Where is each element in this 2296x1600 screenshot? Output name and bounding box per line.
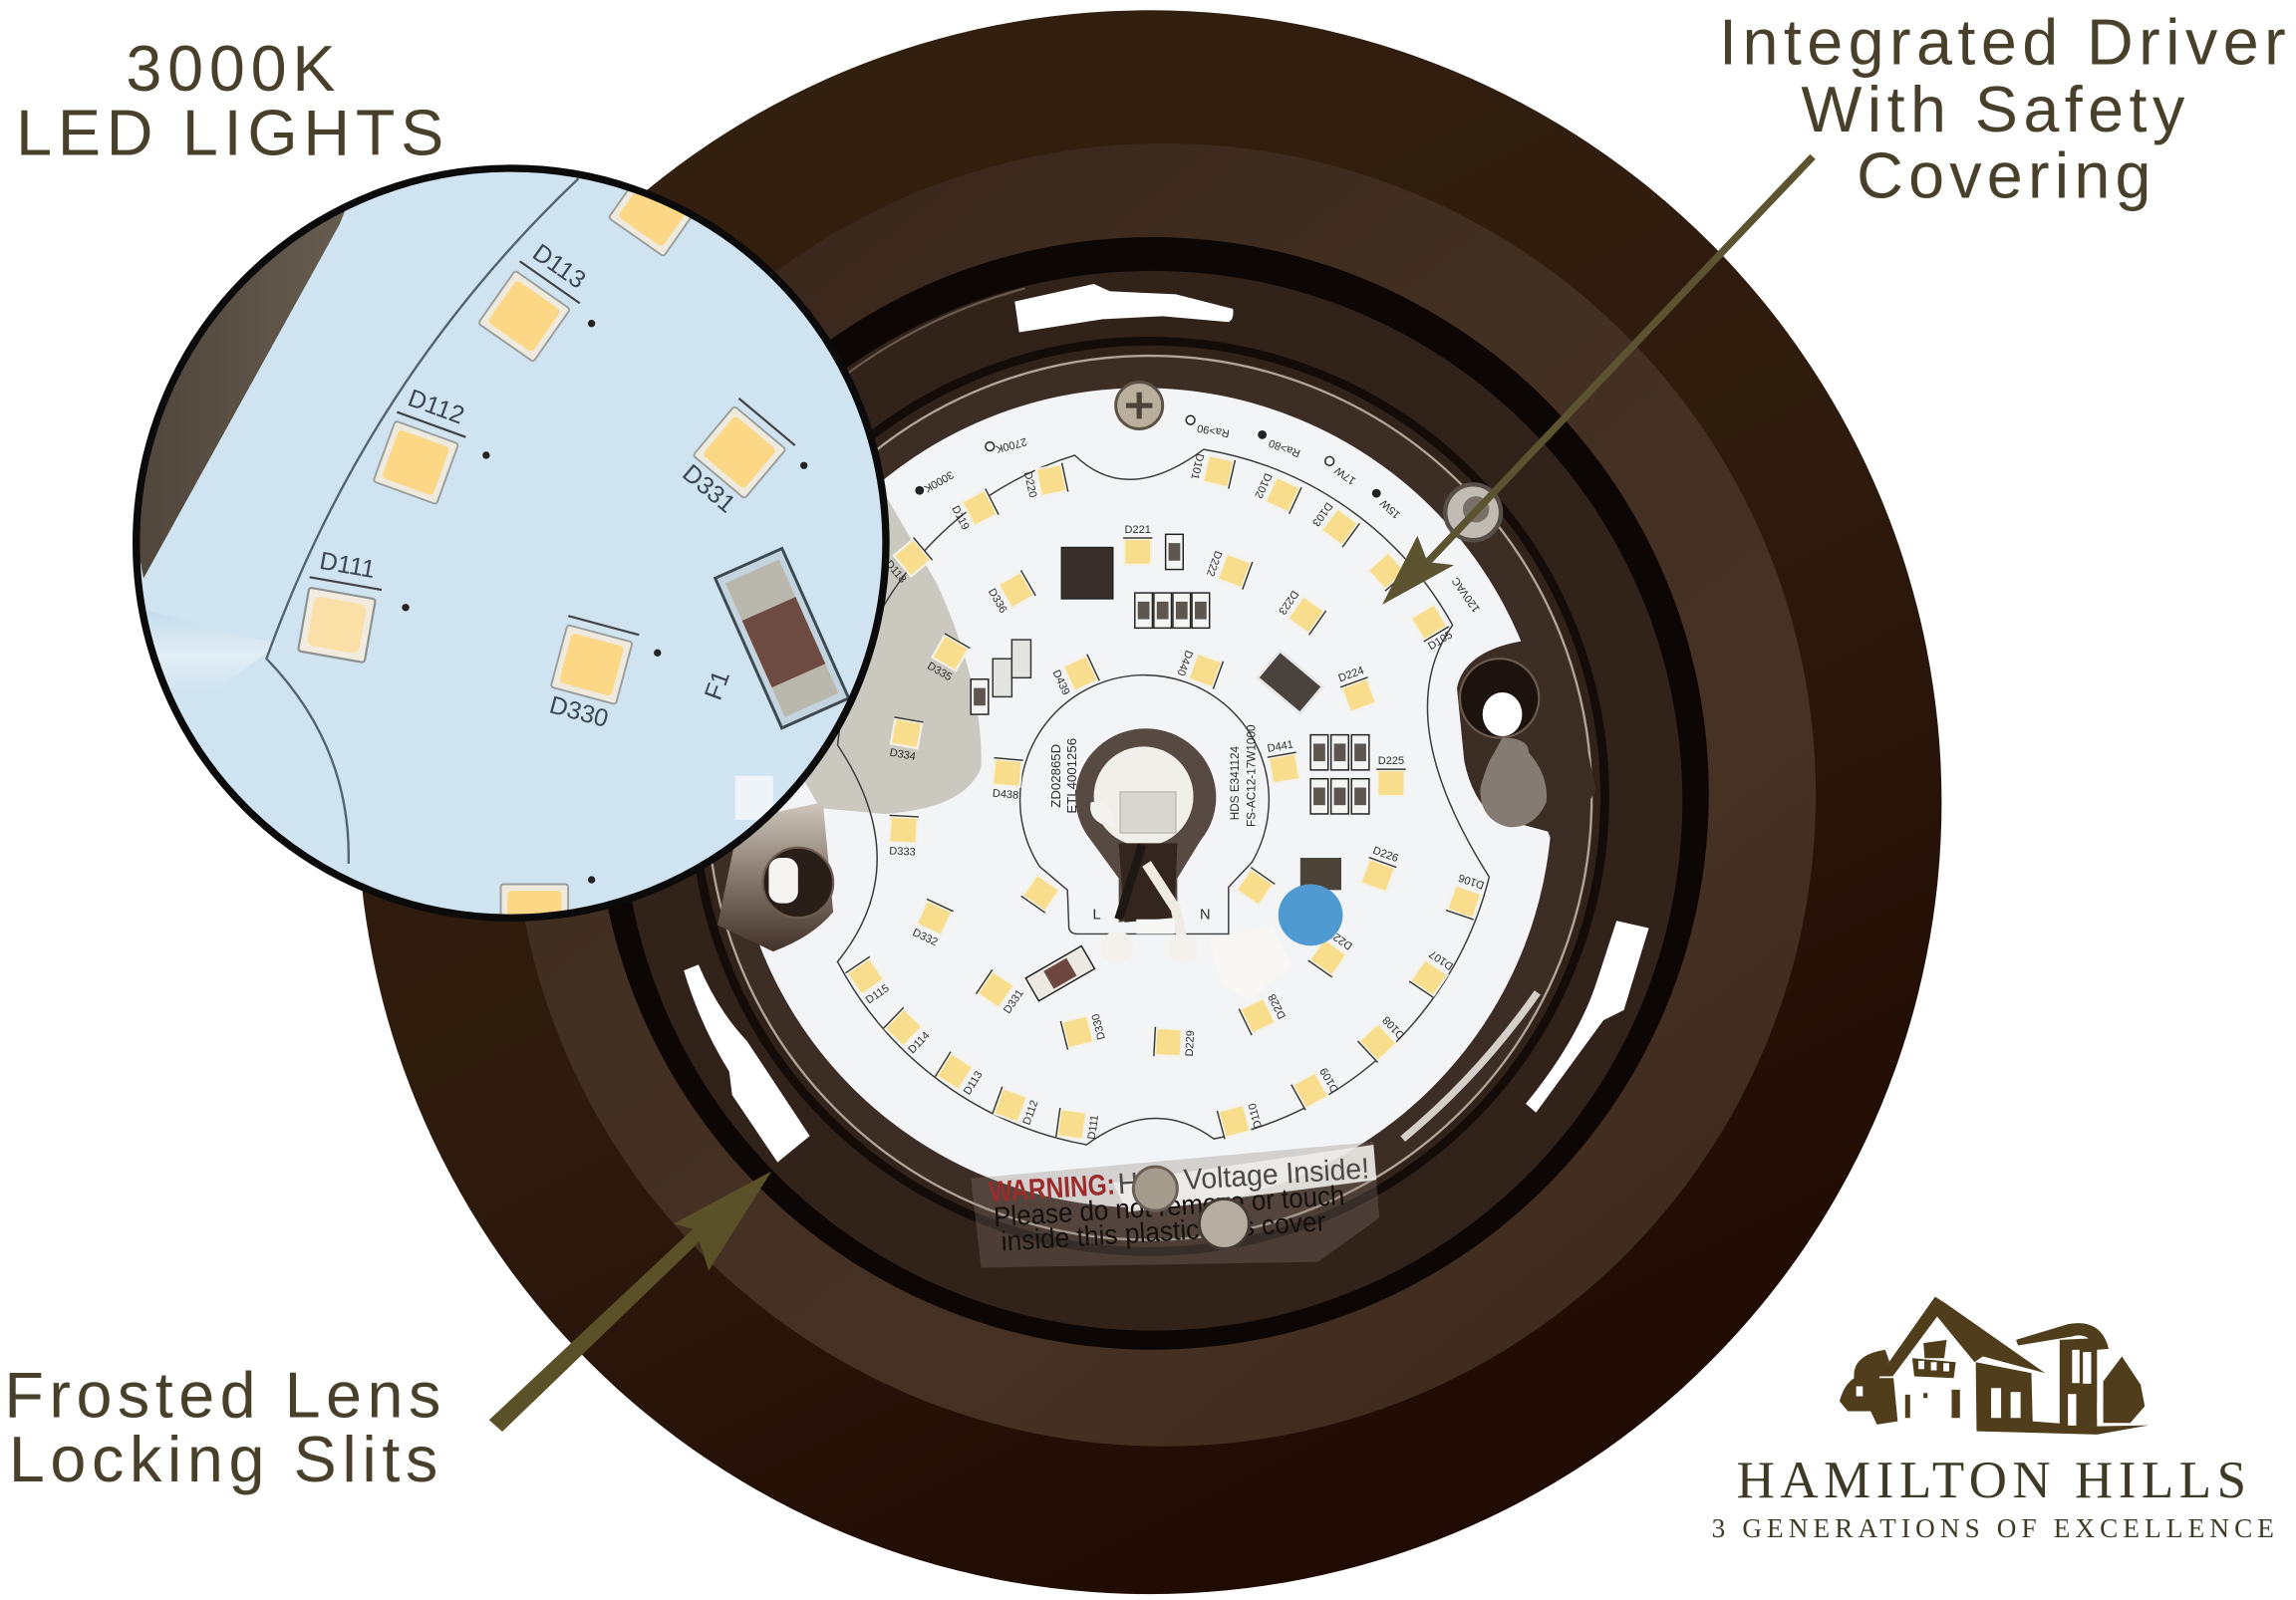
arrow: frosted lens slits	[489, 1171, 771, 1432]
LEDs on board: D115	[864, 982, 892, 1006]
LED track outline	[837, 449, 1489, 1145]
label: frosted lens locking slits: Locking Slits	[9, 1423, 437, 1495]
center wire opening	[1075, 728, 1216, 963]
warning text: Please do not remove or touch	[993, 1180, 1345, 1232]
label: frosted lens locking slits: Frosted Lens	[4, 1358, 440, 1431]
tagline: 3 GENERATIONS OF EXCELLENCE	[1712, 1513, 2274, 1543]
board silkscreen print: HDS E341124	[1229, 746, 1242, 820]
inset border	[137, 168, 886, 918]
LEDs on board: D110	[1247, 1102, 1265, 1130]
LEDs on board: D105	[1426, 629, 1455, 653]
LED D112	[373, 389, 466, 504]
circuit board	[718, 383, 1596, 1267]
keyhole opening	[1483, 692, 1522, 736]
warning sticker	[971, 1142, 1379, 1267]
LED partial bottom	[500, 883, 570, 915]
LEDs on board: D331	[1002, 987, 1026, 1016]
LEDs on board: D112	[1021, 1099, 1041, 1127]
stepped inner trim band	[512, 143, 1816, 1447]
LEDs on board: D335	[925, 661, 954, 683]
lens glare streak, lower right	[1403, 992, 1538, 1139]
outer trim ring	[358, 10, 1941, 1594]
board silkscreen print	[915, 415, 1483, 924]
logo: Hamilton Hills	[1712, 1296, 2274, 1543]
label: integrated driver: With Safety	[1801, 73, 2185, 145]
LEDs on board: D441	[1267, 738, 1294, 755]
screws	[1116, 383, 1501, 1248]
bottom screw	[1133, 1167, 1177, 1210]
LEDs on board: D229	[1184, 1030, 1197, 1057]
label: integrated driver	[1719, 6, 2286, 211]
inset magnifier: 3000K LEDs close up	[118, 165, 886, 948]
white wire connectors	[1210, 926, 1292, 1001]
LEDs on board: D332	[911, 927, 940, 948]
LEDs on board: D221	[1125, 524, 1151, 536]
fixture: bronze trim with recessed LED module	[358, 10, 1941, 1594]
lower screw	[1199, 1199, 1249, 1248]
LEDs on board: D330	[1090, 1012, 1108, 1041]
LED D330	[550, 615, 640, 726]
resistor row	[1135, 593, 1210, 628]
circuit trace	[266, 178, 578, 864]
label: 3000K LED lights	[16, 32, 443, 169]
board silkscreen print: Ra>80	[1268, 436, 1302, 459]
keyhole bulb	[1480, 738, 1547, 827]
dark recess ring	[596, 237, 1709, 1350]
top lens locking slit	[1014, 284, 1234, 333]
keyhole slot surround	[1460, 659, 1539, 738]
LEDs on board: D333	[889, 845, 916, 859]
LEDs on board: D108	[1380, 1013, 1407, 1041]
LEDs on board: D225	[1378, 755, 1404, 767]
LED D111: D111	[318, 547, 378, 584]
warning text: High Voltage Inside!	[1117, 1152, 1370, 1200]
LED D111	[297, 552, 383, 664]
label: integrated driver: Integrated Driver	[1719, 6, 2286, 79]
board disc	[732, 388, 1553, 1207]
LEDs on board: D118	[883, 558, 908, 586]
board silkscreen print: 3000K	[922, 468, 956, 495]
blue capacitor	[1279, 884, 1342, 945]
board silkscreen print: 17W	[1332, 463, 1358, 486]
LEDs on board	[845, 451, 1487, 1143]
LEDs on board: D107	[1427, 947, 1456, 972]
LEDs on board: D101	[1188, 452, 1206, 480]
LED D112: D112	[405, 384, 468, 430]
lower left lens locking slit	[684, 964, 810, 1163]
small capacitors	[971, 534, 1183, 714]
lens seat shadow ring	[695, 341, 1604, 1251]
LEDs on board: D223	[1276, 588, 1300, 617]
label: 3000K LED lights: 3000K	[126, 32, 336, 105]
LEDs on board: D109	[1318, 1066, 1341, 1094]
LEDs on board: D111	[1086, 1114, 1101, 1141]
top screw	[1116, 383, 1163, 429]
LEDs on board: D103	[1309, 500, 1334, 528]
LEDs on board: D102	[1252, 471, 1274, 500]
LEDs on board: D119	[949, 504, 972, 532]
LEDs on board: D222	[1204, 549, 1224, 578]
board glare band	[146, 611, 277, 677]
fuse F1 close up	[716, 549, 849, 728]
board silkscreen print: ZD02865D	[1048, 744, 1063, 808]
stray white mark	[735, 776, 773, 820]
keyhole mounting tab	[1457, 642, 1596, 852]
bronze mounting plate	[623, 271, 1682, 1331]
driver components	[971, 534, 1369, 1001]
LEDs on board: D226	[1371, 845, 1400, 865]
warning text: WARNING:	[989, 1168, 1116, 1208]
arrow: integrated driver	[1382, 156, 1813, 605]
board silkscreen print: 120VAC	[1450, 575, 1483, 615]
plate highlight arc	[842, 288, 1025, 378]
left mounting tab and screw hole	[718, 802, 833, 951]
upper right screw	[1445, 484, 1501, 540]
LEDs on board: D114	[906, 1029, 933, 1056]
lens shadow on board	[776, 439, 982, 814]
board silkscreen print: Ra>90	[1196, 421, 1231, 439]
dark housing wedge	[140, 211, 345, 578]
inset contents	[118, 165, 849, 948]
label F1: F1	[700, 667, 735, 703]
driver chip U2	[1258, 651, 1322, 713]
board silkscreen print: N	[1200, 908, 1211, 924]
warning text	[989, 1152, 1373, 1257]
warning text: inside this plastic lens cover	[1001, 1205, 1326, 1257]
LEDs on board: D440	[1175, 649, 1195, 677]
LED D113: D113	[527, 238, 591, 295]
board silkscreen print: 15W	[1377, 496, 1403, 521]
board silkscreen print: FS-AC12-17W1000	[1245, 724, 1258, 827]
label: 3000K LED lights: LED LIGHTS	[16, 97, 443, 169]
LED D113	[478, 243, 585, 362]
brand name: HAMILTON HILLS	[1737, 1452, 2246, 1509]
center conductor outline	[1020, 675, 1269, 933]
LEDs on board: D113	[962, 1069, 986, 1097]
resistor block	[1310, 735, 1369, 814]
icon: house	[1840, 1296, 2149, 1435]
LED D331	[682, 398, 795, 514]
label: frosted lens locking slits	[4, 1358, 440, 1495]
LEDs on board: D334	[889, 747, 917, 763]
sticker light strip	[1113, 1145, 1376, 1212]
board silkscreen print: ETL4001256	[1064, 738, 1079, 814]
LED D330: D330	[546, 690, 611, 733]
right lens locking slit	[1526, 921, 1649, 1113]
LED D331: D331	[677, 459, 740, 519]
driver chip U1	[1061, 548, 1113, 599]
LEDs on board: D106	[1457, 871, 1486, 891]
LEDs on board: D439	[1049, 668, 1071, 697]
LEDs on board: D336	[986, 587, 1009, 616]
board silkscreen print: 2700K	[994, 435, 1028, 455]
board silkscreen print: L	[1092, 908, 1101, 924]
LEDs on board: D438	[992, 788, 1019, 802]
LEDs on board: D227	[1326, 927, 1355, 951]
LEDs on board: D228	[1267, 992, 1289, 1021]
inset background	[137, 168, 886, 918]
LEDs on board: D224	[1337, 665, 1365, 684]
dark diode behind capacitor	[1300, 858, 1341, 890]
lens seat ring	[708, 356, 1591, 1240]
label: integrated driver: Covering	[1857, 138, 2152, 211]
LED partial top	[608, 190, 692, 257]
polarity dots	[402, 320, 807, 884]
LEDs on board: D220	[1021, 470, 1038, 499]
fuse F1	[1025, 946, 1094, 1001]
